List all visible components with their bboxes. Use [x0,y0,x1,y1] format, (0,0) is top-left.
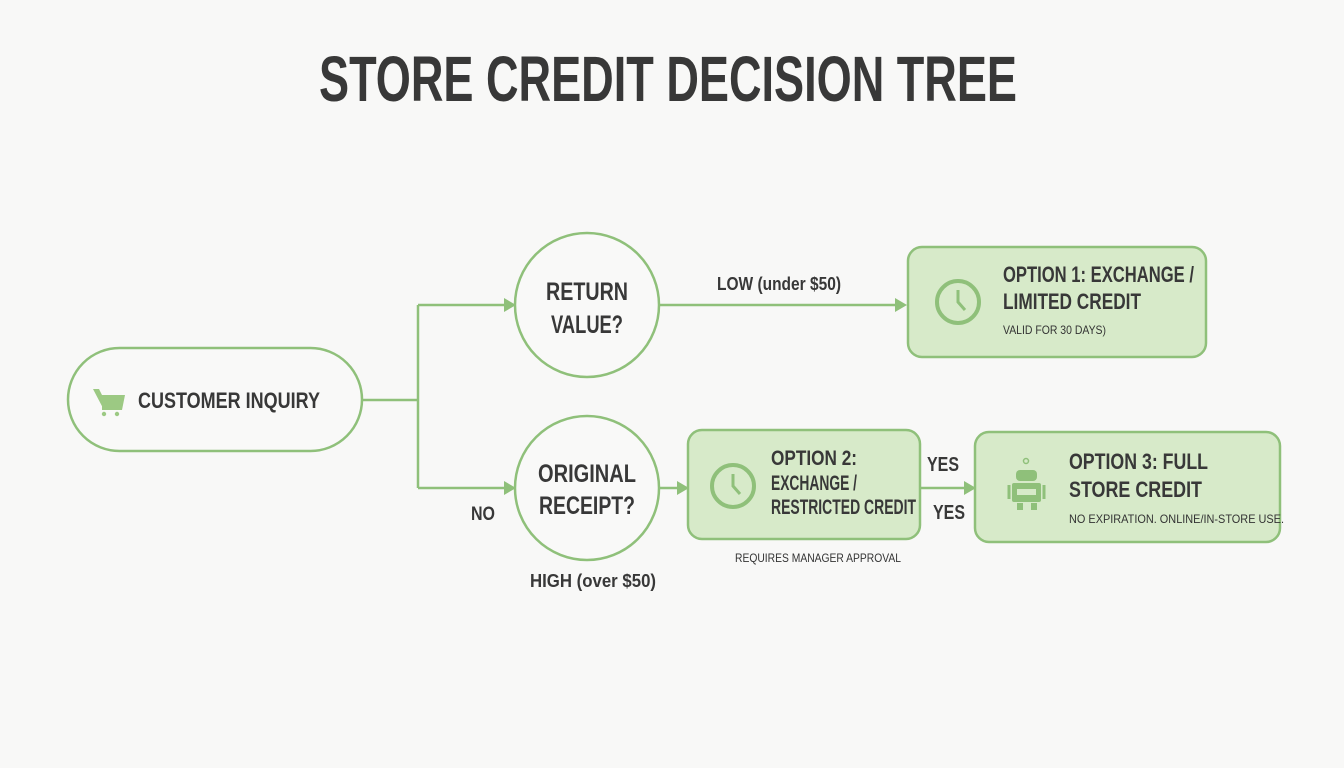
option 1 box: OPTION 1: EXCHANGE / [1003,262,1194,287]
option 3 box: OPTION 3: FULL [1069,449,1208,474]
labels: yes [927,454,965,524]
label: no: NO [471,504,495,525]
node: customer inquiry: CUSTOMER INQUIRY [138,388,320,413]
decision: original receipt: ORIGINAL [538,460,636,488]
decision: original receipt [515,416,659,560]
option 2 box [688,430,920,539]
labels: yes: YES [927,454,959,476]
icon: cart [93,389,125,416]
decision: return value: RETURN [546,278,628,306]
option 3 box [975,432,1284,542]
icon: clock [712,465,754,507]
connectors [362,305,970,488]
decision: return value [515,233,659,377]
label: manager approval: REQUIRES MANAGER APPROVAL [735,551,901,565]
option 3 box: STORE CREDIT [1069,477,1202,502]
option 3 box: NO EXPIRATION. ONLINE/IN-STORE USE. [1069,512,1284,526]
option 2 box: EXCHANGE / [771,472,857,495]
option 1 box: LIMITED CREDIT [1003,289,1141,314]
title: STORE CREDIT DECISION TREE [319,43,1017,115]
option 2 box: RESTRICTED CREDIT [771,496,916,519]
option 2 box: OPTION 2: [771,447,857,470]
decision: original receipt: RECEIPT? [539,492,635,520]
node: customer inquiry [68,348,362,451]
labels: yes: YES [933,502,965,524]
option 1 box [908,247,1206,357]
label: low: LOW (under $50) [717,274,841,294]
arrowheads [504,298,976,495]
icon: robot [1009,458,1044,510]
icon: clock [937,281,979,323]
option 1 box: VALID FOR 30 DAYS) [1003,323,1106,337]
decision: return value: VALUE? [551,311,623,339]
label: high: HIGH (over $50) [530,571,656,591]
